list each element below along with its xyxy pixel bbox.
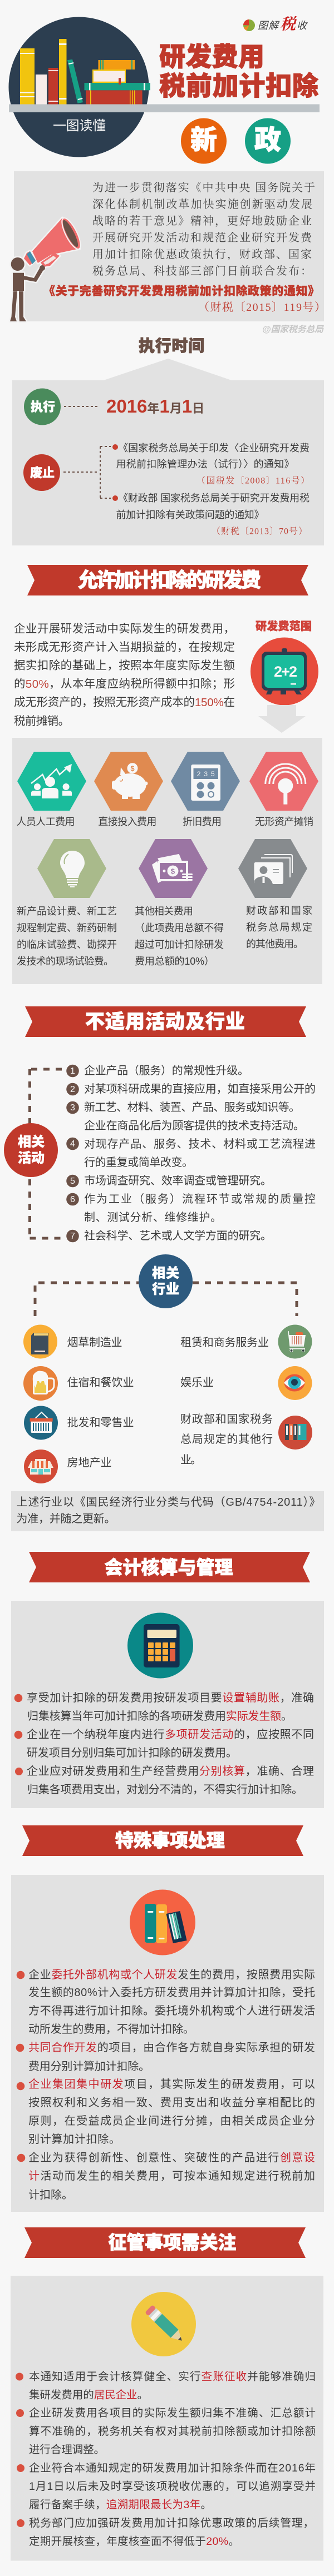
rule 1: 享受加计扣除的研发费用按研发项目要设置辅助账，准确: [27, 1691, 314, 1704]
rule: joint development: [16, 2041, 315, 2073]
item 3: [66, 1101, 304, 1132]
note: classification standard: 为准，并随之更新。: [17, 1512, 116, 1525]
category: other related: （此项费用总额不得: [135, 922, 224, 934]
rule: commissioned R&D: 发生额的80%计入委托方研发费用并计算加计扣除，受托: [28, 1986, 315, 1999]
rule: creative design: 企业为获得创新性、创意性、突破性的产品进行创意设: [28, 2151, 315, 2164]
category: personnel: 人员人工费用: [17, 816, 75, 827]
industry: entertainment: 娱乐业: [180, 1376, 214, 1389]
item 5: 5: [70, 1177, 75, 1186]
banner: accounting and management: 会计核算与管理: [105, 1557, 233, 1578]
category: other related: $: [171, 867, 175, 875]
rule: group R&D: 原则，在受益成员企业间进行分摊，由相关成员企业分: [28, 2115, 315, 2127]
item 7: 7: [70, 1232, 75, 1241]
banner: collection and administration: [24, 2227, 306, 2258]
rule: commissioned R&D: 方不得再进行加计扣除。委托境外机构或个人进行研发活: [28, 2004, 315, 2017]
item 7: 社会科学、艺术或人文学方面的研究。: [84, 1229, 272, 1242]
category: new product design: [17, 839, 117, 967]
list: inapplicable activities: [66, 1064, 316, 1242]
icon: blackboard: 2+2: [274, 663, 297, 680]
icon: books: [130, 1889, 195, 1955]
intro paragraph: 税务总局、科技部三部门日前联合发布：: [92, 265, 312, 277]
dashed connector: [64, 406, 98, 407]
category: intangible amortization: [249, 752, 318, 827]
badge: new: 新: [190, 126, 217, 155]
heading: effective date: 执行时间: [139, 337, 204, 355]
heading: R&D expense scope: 研发费范围: [256, 619, 312, 633]
rule: retroactive claim: 企业符合本通知规定的研发费用加计扣除条件而在2016年: [29, 2462, 316, 2474]
title: [159, 42, 318, 101]
industry: wholesale and retail: 批发和零售业: [67, 1416, 134, 1429]
industry: real estate: 房地产业: [67, 1456, 111, 1469]
logo: tu jie shui shou: [243, 16, 308, 33]
industry: tobacco: [23, 1324, 122, 1359]
rule: creative design: [17, 2151, 315, 2201]
repealed document 1: 《国家税务总局关于印发〈企业研究开发费: [118, 443, 310, 454]
rule: creative design: 计活动而发生的相关费用，可按本通知规定进行税前加: [28, 2170, 315, 2182]
rule: retroactive claim: 履行备案手续，追溯期限最长为3年。: [29, 2499, 212, 2511]
rule: commissioned R&D: 动所发生的费用，不得加计扣除。: [28, 2023, 194, 2036]
rule: group R&D: 企业集团集中研发项目，其实际发生的研发费用，可以: [28, 2078, 315, 2091]
note: classification standard: 上述行业以《国民经济行业分类与代码（GB/4754-2011）》: [17, 1496, 321, 1508]
badge: related industries: [139, 1254, 193, 1308]
icon: calculator: [127, 1612, 193, 1678]
badge: repealed: [23, 454, 60, 491]
industry: leasing and business services: [180, 1324, 312, 1359]
text: one chart read: 一图读懂: [53, 118, 106, 133]
repealed document 2: [112, 493, 310, 536]
category: other related: 超过可加计扣除研发: [135, 939, 224, 950]
repealed document 2: 前加计扣除有关政策问题的通知》: [116, 509, 264, 520]
rule: inaccurate amounts: 企业研发费用各项目的实际发生额归集不准确、汇总额计: [29, 2407, 316, 2419]
text: deduction rule: 的50%，从本年度应纳税所得额中扣除；形: [14, 677, 235, 691]
badge: related industries: 相关: [152, 1265, 179, 1281]
rule 1: [14, 1691, 314, 1723]
badge: effective: 执行: [31, 400, 55, 414]
industry: other by MOF and SAT: 业。: [180, 1453, 202, 1466]
industry: other by MOF and SAT: [180, 1413, 312, 1466]
rule 2: 企业在一个纳税年度内进行多项研发活动的，应按照不同: [27, 1728, 314, 1741]
panel: effective date: [12, 359, 324, 545]
banner: special items: [22, 1825, 303, 1856]
arrow: down to expense grid: [258, 705, 306, 733]
panel: expense categories: [12, 738, 322, 984]
logo: tu jie shui shou: 图解: [258, 20, 280, 31]
rule: joint development: 共同合作开发的项目，由合作各方就自身实际承担的研发: [28, 2041, 315, 2054]
rule 3: [15, 1765, 314, 1796]
industry: entertainment: [180, 1366, 312, 1400]
repealed document 2: （财税〔2013〕70号）: [212, 526, 307, 536]
icon: blackboard: [250, 637, 318, 705]
logo: tu jie shui shou: 收: [297, 20, 308, 31]
category: other per MOF and SAT: 税务总局规定: [246, 922, 312, 933]
item 6: 6: [70, 1195, 75, 1204]
banner: eligible R&D expenses: [27, 565, 308, 595]
rule: follow-up review: 定期开展核查，年度核查面不得低于20%。: [29, 2535, 239, 2548]
repealed document 1: 用税前扣除管理办法（试行）〉的通知》: [116, 459, 294, 470]
rule: commissioned R&D: 企业委托外部机构或个人研发发生的费用，按照费用实际: [28, 1968, 315, 1981]
rule: inaccurate amounts: 进行合理调整。: [29, 2444, 105, 2456]
industry: real estate: [24, 1450, 111, 1483]
text: deduction rule: 企业开展研发活动中实际发生的研发费用，: [14, 623, 235, 635]
item 4: [66, 1138, 316, 1169]
banner: inapplicable activities and industries: 不适用活动及行业: [85, 1011, 245, 1033]
panel: collection and administration: [11, 2276, 323, 2561]
title: 税前加计扣除: [159, 71, 318, 101]
icon: person with megaphone: [10, 216, 84, 321]
text: deduction rule: 未形成无形资产计入当期损益的，在按规定: [14, 641, 235, 654]
rule: joint development: 费用分别计算加计扣除。: [28, 2060, 150, 2073]
repealed document 2: 《财政部 国家税务总局关于研究开发费用税: [118, 493, 310, 504]
category: depreciation: 235: [197, 770, 215, 778]
dashed connector: related industries: [35, 1283, 297, 1316]
banner: eligible R&D expenses: 允许加计扣除的研发费: [78, 568, 261, 592]
panel: special items: [11, 1875, 324, 2212]
category: other related: [135, 839, 224, 967]
category: other related: 其他相关费用: [135, 906, 193, 917]
rule: inaccurate amounts: 算不准确的，税务机关有权对其税前扣除额或加计扣除额: [29, 2425, 316, 2438]
item 5: 市场调查研究、效率调查或管理研究。: [84, 1174, 272, 1187]
repealed connector tree: [63, 446, 111, 498]
item 3: 新工艺、材料、装置、产品、服务或知识等。: [84, 1101, 300, 1114]
rule 1: 归集核算当年可加计扣除的各项研发费用实际发生额。: [27, 1710, 292, 1723]
notice title: 《关于完善研究开发费用税前加计扣除政策的通知》: [43, 285, 320, 298]
banner: special items: 特殊事项处理: [115, 1830, 225, 1850]
industry: other by MOF and SAT: 财政部和国家税务: [180, 1413, 273, 1426]
category: direct input: 直接投入费用: [98, 816, 156, 827]
category: other related: 费用总额的10%）: [135, 956, 214, 967]
rule: commissioned R&D: [17, 1968, 315, 2036]
rule 3: 企业应对研发费用和生产经营费用分别核算，准确、合理: [27, 1765, 314, 1778]
category: personnel: [17, 752, 86, 827]
banner: inapplicable activities and industries: [25, 1006, 306, 1037]
category: other per MOF and SAT: 的其他费用。: [246, 939, 303, 950]
panel: introduction: [10, 171, 326, 321]
badge: effective: [24, 388, 61, 425]
repealed document 1: （国税发〔2008〕116号）: [197, 476, 310, 486]
watermark: @国家税务总局: [262, 325, 324, 335]
banner: collection and administration: 征管事项需关注: [108, 2232, 236, 2253]
badge: related activities: 相关: [18, 1134, 45, 1150]
rule: retroactive claim: [17, 2462, 316, 2511]
item 2: 2: [70, 1085, 75, 1094]
industry: wholesale and retail: [24, 1406, 134, 1440]
industry: lodging and catering: 住宿和餐饮业: [67, 1376, 134, 1389]
item 4: 行的重复或简单改变。: [84, 1156, 193, 1169]
badge: new: [181, 118, 227, 163]
badge: related industries: 行业: [152, 1282, 179, 1297]
header: bookshelf illustration: [9, 17, 320, 157]
rule: follow-up review: [17, 2517, 314, 2548]
item 4: 4: [70, 1139, 75, 1149]
rule: group R&D: 按照权利和义务相一致、费用支出和收益分享相配比的: [28, 2096, 315, 2109]
icon: pencil: [131, 2292, 196, 2356]
item 6: 作为工业（服务）流程环节或常规的质量控: [84, 1193, 316, 1205]
item 2: 对某项科研成果的直接应用，如直接采用公开的: [84, 1083, 316, 1095]
panel: accounting and management: [11, 1601, 324, 1808]
logo: tu jie shui shou: 税: [280, 16, 297, 33]
item 6: [66, 1193, 316, 1224]
category: direct input: $: [130, 764, 135, 773]
notice number: （财税〔2015〕119号）: [198, 301, 326, 314]
intro paragraph: 战略的若干意见》精神，更好地鼓励企业: [92, 215, 312, 227]
category: new product design: 规程制定费、新药研制: [17, 922, 117, 934]
category: other per MOF and SAT: 财政部和国家: [246, 905, 312, 916]
text: deduction rule: [14, 623, 235, 727]
rule 3: 归集各项费用支出，对划分不清的，不得实行加计扣除。: [27, 1783, 303, 1796]
item 6: 制、测试分析、维修维护。: [84, 1211, 222, 1224]
text: deduction rule: 据实扣除的基础上，按照本年度实际发生额: [14, 659, 235, 672]
intro paragraph: 开展研究开发活动和规范企业研究开发费: [92, 231, 312, 244]
industry: other by MOF and SAT: 总局规定的其他行: [180, 1433, 273, 1446]
badge: policy: 政: [254, 126, 281, 155]
rule: follow-up review: 税务部门应加强研发费用加计扣除优惠政策的后续管理，: [29, 2517, 314, 2529]
intro paragraph: 为进一步贯彻落实《中共中央 国务院关于: [92, 181, 315, 194]
rule: eligibility: 集研发费用的居民企业。: [29, 2389, 148, 2401]
rule: eligibility: [16, 2371, 316, 2401]
item 1: 企业产品（服务）的常规性升级。: [84, 1064, 249, 1077]
item 1: 1: [70, 1066, 75, 1076]
item 4: 对现存产品、服务、技术、材料或工艺流程进: [84, 1138, 316, 1150]
rule 2: 研发项目分别归集可加计扣除的研发费用。: [27, 1746, 237, 1759]
text: deduction rule: 税前摊销。: [14, 715, 70, 727]
intro paragraph: [92, 181, 315, 277]
item 3: 企业在商品化后为顾客提供的技术支持活动。: [84, 1119, 304, 1132]
category: new product design: 的临床试验费、勘探开: [17, 939, 117, 950]
intro paragraph: 深化体制机制改革加快实施创新驱动发展: [92, 198, 312, 211]
badge: policy: [245, 118, 291, 163]
category: depreciation: [171, 752, 240, 827]
rule: retroactive claim: 1月1日以后未及时享受该项税收优惠的，可以追溯享受并: [29, 2480, 316, 2493]
category: depreciation: 折旧费用: [183, 816, 222, 827]
industry: tobacco: 烟草制造业: [67, 1336, 122, 1349]
text: deduction rule: 成无形资产的，按照无形资产成本的150%在: [14, 696, 235, 708]
rule 2: [14, 1728, 314, 1759]
rule: group R&D: 别计算加计扣除。: [28, 2133, 120, 2146]
date: 2016年1月1日: [106, 396, 204, 416]
title: 研发费用: [159, 42, 264, 71]
dashed connector: related activities: [30, 1069, 63, 1238]
rule: creative design: 计扣除。: [28, 2188, 73, 2201]
repealed document 1: [112, 443, 310, 486]
intro paragraph: 用加计扣除优惠政策执行，财政部、国家: [92, 248, 312, 261]
rule: eligibility: 本通知适用于会计核算健全、实行查账征收并能够准确归: [29, 2371, 316, 2383]
category: direct input: [94, 752, 163, 827]
category: new product design: 新产品设计费、新工艺: [17, 906, 117, 917]
badge: related activities: 活动: [18, 1151, 45, 1165]
item 3: 3: [70, 1103, 75, 1113]
industry: lodging and catering: [23, 1366, 134, 1401]
rule: group R&D: [17, 2078, 315, 2146]
category: other per MOF and SAT: [238, 839, 312, 950]
note: classification standard: [11, 1491, 324, 1531]
rule: inaccurate amounts: [16, 2407, 316, 2456]
industry: leasing and business services: 租赁和商务服务业: [180, 1336, 269, 1349]
category: new product design: 发技术的现场试验费。: [17, 956, 114, 967]
banner: accounting and management: [29, 1552, 310, 1582]
badge: related activities: [4, 1123, 58, 1177]
category: intangible amortization: 无形资产摊销: [255, 816, 313, 827]
badge: repealed: 废止: [30, 466, 55, 480]
